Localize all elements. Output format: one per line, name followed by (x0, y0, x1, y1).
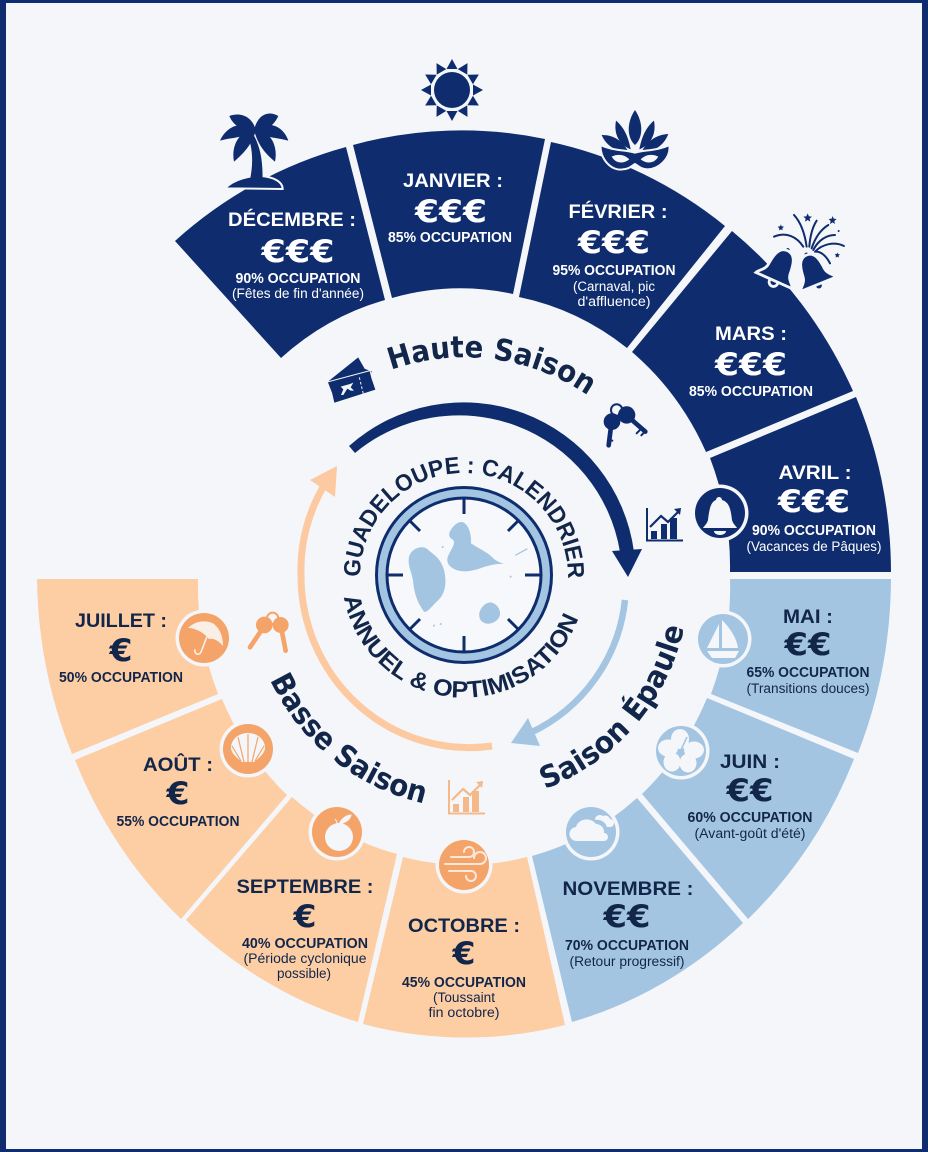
icon: peach badge (308, 804, 366, 860)
icon: carnival mask (601, 110, 670, 170)
panel: septembre (186, 797, 397, 1022)
icon: sailboat badge (694, 610, 752, 668)
occupation: décembre: 90% OCCUPATION (236, 271, 360, 287)
label: juillet: JUILLET : (75, 611, 167, 632)
label: janvier: JANVIER : (403, 171, 503, 192)
occupation: septembre: 40% OCCUPATION (242, 936, 368, 952)
icon: growth chart peach (449, 780, 485, 814)
note: avril: (Vacances de Pâques) (746, 539, 882, 554)
note: mai: (Transitions douces) (746, 681, 870, 696)
price: décembre: €€€ (260, 234, 334, 270)
occupation: novembre: 70% OCCUPATION (565, 938, 689, 954)
note line 2: février: d'affluence) (578, 294, 650, 309)
heading: Saison Épaule: Saison Épaule (540, 626, 683, 788)
label: décembre: DÉCEMBRE : (228, 209, 356, 231)
price: mai: €€ (783, 627, 832, 663)
price: septembre: € (292, 899, 316, 935)
occupation: janvier: 85% OCCUPATION (388, 230, 512, 246)
occupation: août: 55% OCCUPATION (116, 814, 240, 830)
occupation: juin: 60% OCCUPATION (688, 810, 812, 826)
note: décembre: (Fêtes de fin d'année) (232, 286, 364, 301)
note: février: (Carnaval, pic (573, 279, 655, 294)
note line 2: octobre: fin octobre) (428, 1005, 500, 1020)
icon: hibiscus badge (652, 722, 710, 780)
icon: wind badge (436, 836, 492, 894)
arrow: blue shoulder season (511, 600, 625, 746)
arrow: navy high season (349, 402, 642, 577)
note line 2: septembre: possible) (277, 966, 331, 981)
panel: décembre (175, 147, 385, 358)
occupation: avril: 90% OCCUPATION (752, 523, 876, 539)
center title top: GUADELOUPE : CALENDRIER (344, 456, 584, 578)
icon: bells and fireworks (753, 213, 844, 297)
panel: avril (710, 397, 891, 572)
occupation: mars: 85% OCCUPATION (689, 384, 813, 400)
label: juin: JUIN : (720, 752, 780, 773)
label: mars: MARS : (715, 324, 787, 345)
panel: juin (642, 698, 854, 919)
heading: Basse Saison: Basse Saison (271, 672, 425, 803)
center title bottom: ANNUEL & OPTIMISATION (344, 598, 578, 698)
price: avril: €€€ (777, 484, 850, 520)
price: juin: €€ (725, 773, 774, 809)
panel: juillet (37, 579, 218, 754)
note: novembre: (Retour progressif) (570, 954, 684, 969)
icon: growth chart navy (647, 508, 683, 540)
label: septembre: SEPTEMBRE : (236, 877, 374, 898)
label: mai: MAI : (783, 607, 833, 628)
heading: Haute Saison: Haute Saison (387, 336, 594, 394)
occupation: mai: 65% OCCUPATION (746, 665, 870, 681)
label: février: FÉVRIER : (568, 201, 668, 223)
occupation: octobre: 45% OCCUPATION (402, 975, 526, 991)
panel: janvier (353, 130, 545, 298)
icon: palm tree (220, 114, 288, 189)
note: septembre: (Période cyclonique (244, 951, 366, 966)
map of Guadeloupe (409, 522, 527, 627)
icon: keys navy (604, 404, 645, 445)
panel: mai (711, 579, 891, 753)
icon: shell badge (220, 720, 276, 778)
price: juillet: € (108, 633, 132, 669)
occupation: février: 95% OCCUPATION (552, 263, 676, 279)
panel: mars (632, 231, 853, 452)
price: février: €€€ (577, 225, 650, 261)
label: avril: AVRIL : (778, 463, 852, 484)
panel: août (75, 699, 287, 919)
label: octobre: OCTOBRE : (408, 916, 520, 937)
icon: bell badge (692, 484, 748, 542)
price: octobre: € (451, 936, 476, 972)
arrow: peach low season (301, 466, 492, 748)
icon: umbrella badge (176, 610, 232, 666)
occupation: juillet: 50% OCCUPATION (59, 670, 183, 686)
icon: cloud badge (562, 804, 620, 860)
price: mars: €€€ (714, 347, 787, 383)
icon: plane ticket (325, 357, 376, 403)
note: juin: (Avant-goût d'été) (694, 826, 806, 841)
label: novembre: NOVEMBRE : (562, 879, 694, 900)
price: août: € (165, 776, 190, 812)
panel: octobre (363, 857, 565, 1038)
icon: keys peach (250, 613, 288, 651)
price: janvier: €€€ (414, 194, 487, 230)
icon: sun (421, 59, 483, 121)
panel: novembre (532, 798, 743, 1022)
note: octobre: (Toussaint (433, 990, 495, 1005)
clock with Guadeloupe map (376, 488, 552, 662)
label: août: AOÛT : (143, 754, 213, 776)
panel: février (519, 142, 725, 348)
price: novembre: €€ (602, 899, 650, 935)
